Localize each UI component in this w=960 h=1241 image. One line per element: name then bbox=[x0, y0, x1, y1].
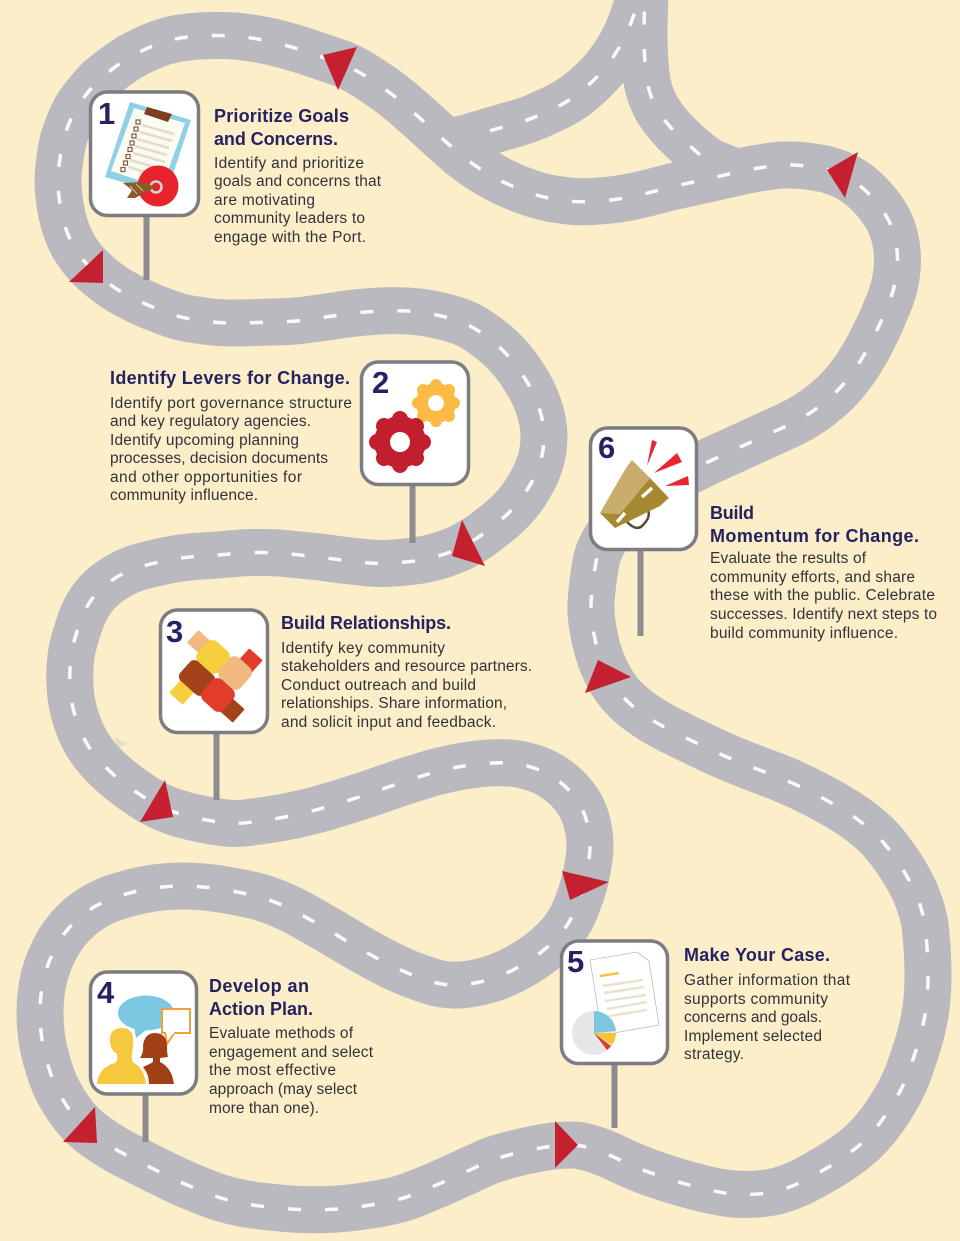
sign 2: gears bbox=[362, 362, 468, 543]
sign 4: speaking people bbox=[90, 972, 196, 1142]
sign 4: speaking people: 4 bbox=[97, 975, 115, 1010]
step 1 text bbox=[214, 106, 382, 246]
step 4 text: engagement and select bbox=[209, 1044, 374, 1061]
step 4 text: more than one). bbox=[209, 1100, 319, 1117]
step 4 text: Develop an bbox=[209, 976, 309, 996]
step 5 text: strategy. bbox=[684, 1046, 744, 1063]
step 6 text: build community influence. bbox=[710, 625, 898, 642]
step 3 text bbox=[281, 613, 532, 731]
step 6 text: Momentum for Change. bbox=[710, 526, 919, 546]
step 2 text: and other opportunities for bbox=[110, 469, 302, 486]
step 5 text: supports community bbox=[684, 991, 828, 1008]
step 1 text: Identify and prioritize bbox=[214, 155, 364, 172]
step 4 text: Action Plan. bbox=[209, 999, 313, 1019]
icon: speech bubbles bbox=[118, 996, 190, 1044]
step 1 text: and Concerns. bbox=[214, 129, 338, 149]
step 6 text: Evaluate the results of bbox=[710, 550, 867, 567]
step 4 text: approach (may select bbox=[209, 1081, 358, 1098]
step 2 text: Identify upcoming planning bbox=[110, 432, 299, 449]
step 1 text: engage with the Port. bbox=[214, 229, 366, 246]
step 5 text: Gather information that bbox=[684, 972, 851, 989]
step 1 text: Prioritize Goals bbox=[214, 106, 349, 126]
step 5 text: Make Your Case. bbox=[684, 945, 830, 965]
step 2 text: processes, decision documents bbox=[110, 450, 328, 467]
step 3 text: relationships. Share information, bbox=[281, 695, 507, 712]
step 2 text: community influence. bbox=[110, 487, 258, 504]
step 3 text: Conduct outreach and build bbox=[281, 677, 476, 694]
icon: red gear bbox=[369, 411, 431, 473]
icon: megaphone bbox=[600, 460, 669, 528]
step 2 text bbox=[110, 368, 352, 504]
icon: sound rays bbox=[647, 440, 689, 486]
sign 5: report and pie chart: 5 bbox=[567, 944, 584, 979]
sign 5: report and pie chart bbox=[562, 941, 668, 1128]
sign 6: megaphone: 6 bbox=[598, 430, 615, 465]
step 6 text bbox=[710, 503, 937, 642]
sign 2: gears: 2 bbox=[372, 365, 389, 400]
sign 1: clipboard and target: 1 bbox=[98, 96, 115, 131]
step 5 text: concerns and goals. bbox=[684, 1009, 822, 1026]
faint road mark bbox=[115, 737, 128, 747]
step 1 text: community leaders to bbox=[214, 210, 365, 227]
step 2 text: Identify port governance structure bbox=[110, 395, 352, 412]
step 4 text bbox=[209, 976, 374, 1117]
step 4 text: Evaluate methods of bbox=[209, 1025, 354, 1042]
sign 1: clipboard and target bbox=[90, 92, 198, 280]
step 6 text: these with the public. Celebrate bbox=[710, 587, 935, 604]
step 3 text: Build Relationships. bbox=[281, 613, 451, 633]
sign 3: clasped hands: 3 bbox=[166, 614, 183, 649]
step 3 text: and solicit input and feedback. bbox=[281, 714, 496, 731]
step 5 text: Implement selected bbox=[684, 1028, 822, 1045]
step 2 text: Identify Levers for Change. bbox=[110, 368, 350, 388]
icon: yellow gear bbox=[412, 379, 460, 427]
step 3 text: stakeholders and resource partners. bbox=[281, 658, 532, 675]
icon: pie chart bbox=[572, 1011, 616, 1055]
icon: hands bbox=[169, 630, 263, 723]
sign 6: megaphone bbox=[590, 428, 696, 636]
icon: two people bbox=[97, 1028, 174, 1084]
step 5 text bbox=[684, 945, 851, 1063]
step 1 text: goals and concerns that bbox=[214, 173, 382, 190]
icon: clipboard bbox=[105, 102, 191, 195]
step 6 text: successes. Identify next steps to bbox=[710, 606, 937, 623]
icon: document bbox=[590, 952, 659, 1035]
icon: target with arrow bbox=[123, 166, 178, 206]
sign 3: clasped hands bbox=[160, 610, 268, 800]
step 6 text: community efforts, and share bbox=[710, 569, 915, 586]
step 4 text: the most effective bbox=[209, 1062, 336, 1079]
step 6 text: Build bbox=[710, 503, 754, 523]
step 1 text: are motivating bbox=[214, 192, 315, 209]
step 3 text: Identify key community bbox=[281, 640, 445, 657]
step 2 text: and key regulatory agencies. bbox=[110, 413, 311, 430]
direction arrows bbox=[63, 47, 858, 1168]
